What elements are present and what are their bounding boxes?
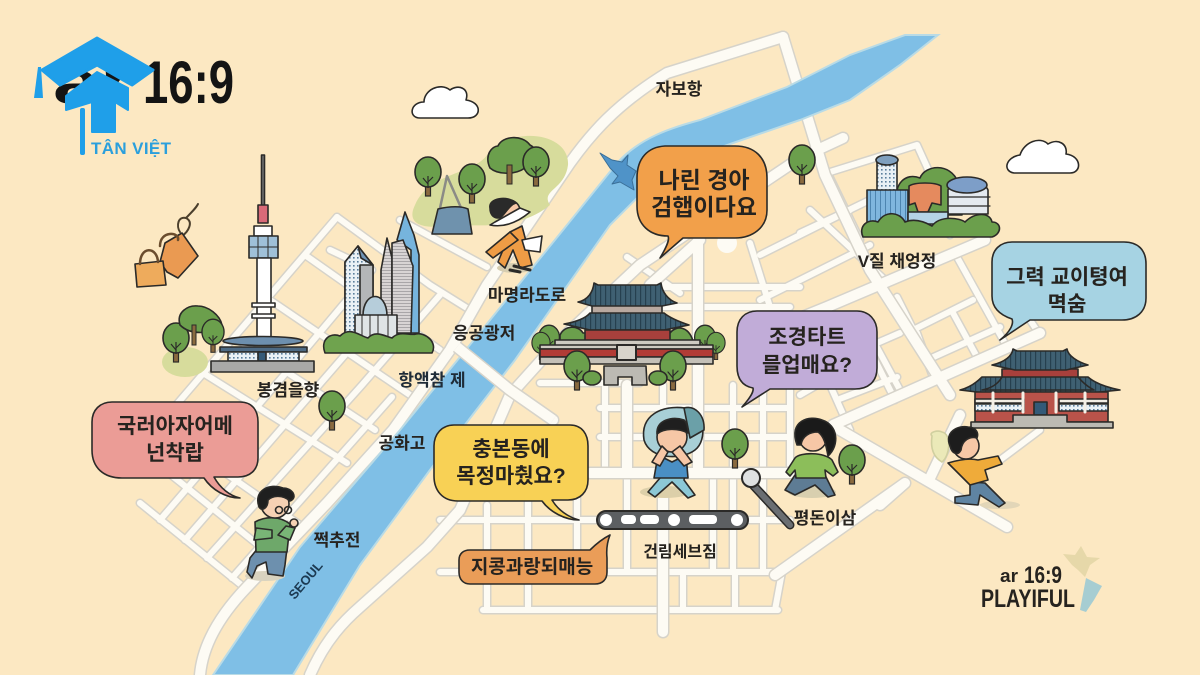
landmark: campus buildings	[862, 155, 1000, 237]
logo: Tan Viet cap and arrow	[34, 38, 172, 158]
badge: ar 16:9 playful	[981, 546, 1102, 613]
logo: 16:9 mark	[34, 38, 234, 158]
label: V jil: V질 채엉정	[858, 252, 936, 271]
landmark: east palace	[960, 349, 1120, 428]
icon: shopping bags	[135, 204, 198, 287]
landmark: Seoul tower	[211, 155, 314, 372]
label: hangaek: 항액참 제	[398, 371, 466, 390]
label: bonggyeom: 봉겸을향	[257, 381, 320, 400]
badge: ar 16:9 playful: PLAYIFUL	[981, 585, 1075, 613]
label: geonrim: 건림세브짐	[643, 543, 717, 561]
road stub under bubble	[717, 233, 737, 253]
bubble: yellow	[434, 425, 588, 520]
icon: blue bag	[432, 176, 472, 234]
bubble: purple: 조경타트	[768, 326, 846, 349]
label: Seoul: SEOUL	[285, 558, 326, 602]
bubble: yellow: 충본동에	[472, 438, 550, 461]
bubble: blue	[992, 242, 1146, 340]
badge: ar 16:9 playful: 16:9	[1024, 562, 1062, 589]
road over river	[457, 347, 553, 420]
bubble: blue: 멱숨	[1048, 293, 1086, 316]
bubble: pink: 넌착랍	[146, 442, 204, 465]
bubble: pink: 국러아자어메	[117, 415, 233, 438]
logo: Tan Viet cap and arrow: TÂN VIỆT	[91, 139, 172, 158]
logo: 16:9 mark: 16:9	[143, 49, 234, 116]
park, trees and bag	[412, 136, 568, 234]
label: pyeongdon: 평돈이삼	[794, 509, 857, 528]
bubble: orange	[637, 146, 767, 258]
bubble: purple	[737, 311, 877, 407]
bubble: orange: 나린 경아	[658, 167, 750, 193]
label: myeongra: 마명라도로	[488, 286, 566, 305]
bubble: pink	[92, 402, 258, 498]
badge: ar 16:9 playful: ar	[1000, 566, 1018, 586]
label: gonghwa: 공화고	[379, 434, 425, 453]
tree near orange bubble	[789, 145, 815, 184]
icon: subway strip	[597, 511, 748, 529]
character: runner	[931, 427, 1020, 509]
river	[213, 35, 938, 675]
character: glasses man	[245, 486, 298, 581]
bubble: purple: 믈업매요?	[762, 354, 852, 377]
icon: cloud left	[412, 87, 478, 118]
tree center	[722, 429, 748, 468]
character: orange walker	[486, 198, 542, 273]
icon: fish	[600, 153, 636, 190]
landmark: skyscrapers	[324, 212, 434, 353]
label: jaboang: 자보항	[656, 80, 703, 99]
bubble: orange: 검햅이다요	[651, 194, 757, 220]
bubble: yellow: 목정마췄요?	[456, 465, 566, 488]
tree by label	[319, 391, 345, 430]
bubble: small orange	[459, 535, 610, 584]
logo: 16:9 mark: ar	[53, 49, 133, 116]
icon: faded star and map	[1063, 546, 1102, 612]
label: eunggong: 응공광저	[453, 324, 515, 343]
icon: pin marker	[742, 469, 790, 525]
landmark: central palace	[532, 283, 725, 390]
label: jjeokchu: 쩍추전	[314, 531, 360, 550]
trees beside tower	[162, 306, 224, 377]
character: boy with hat	[640, 407, 704, 498]
bubble: blue: 그력 교이텽여	[1006, 266, 1128, 289]
icon: cloud right	[1007, 140, 1079, 173]
bubble: small orange: 지콩과랑되매능	[471, 556, 593, 578]
character: woman walking	[785, 418, 838, 498]
street network	[140, 37, 1040, 675]
tree right of woman	[839, 445, 865, 484]
